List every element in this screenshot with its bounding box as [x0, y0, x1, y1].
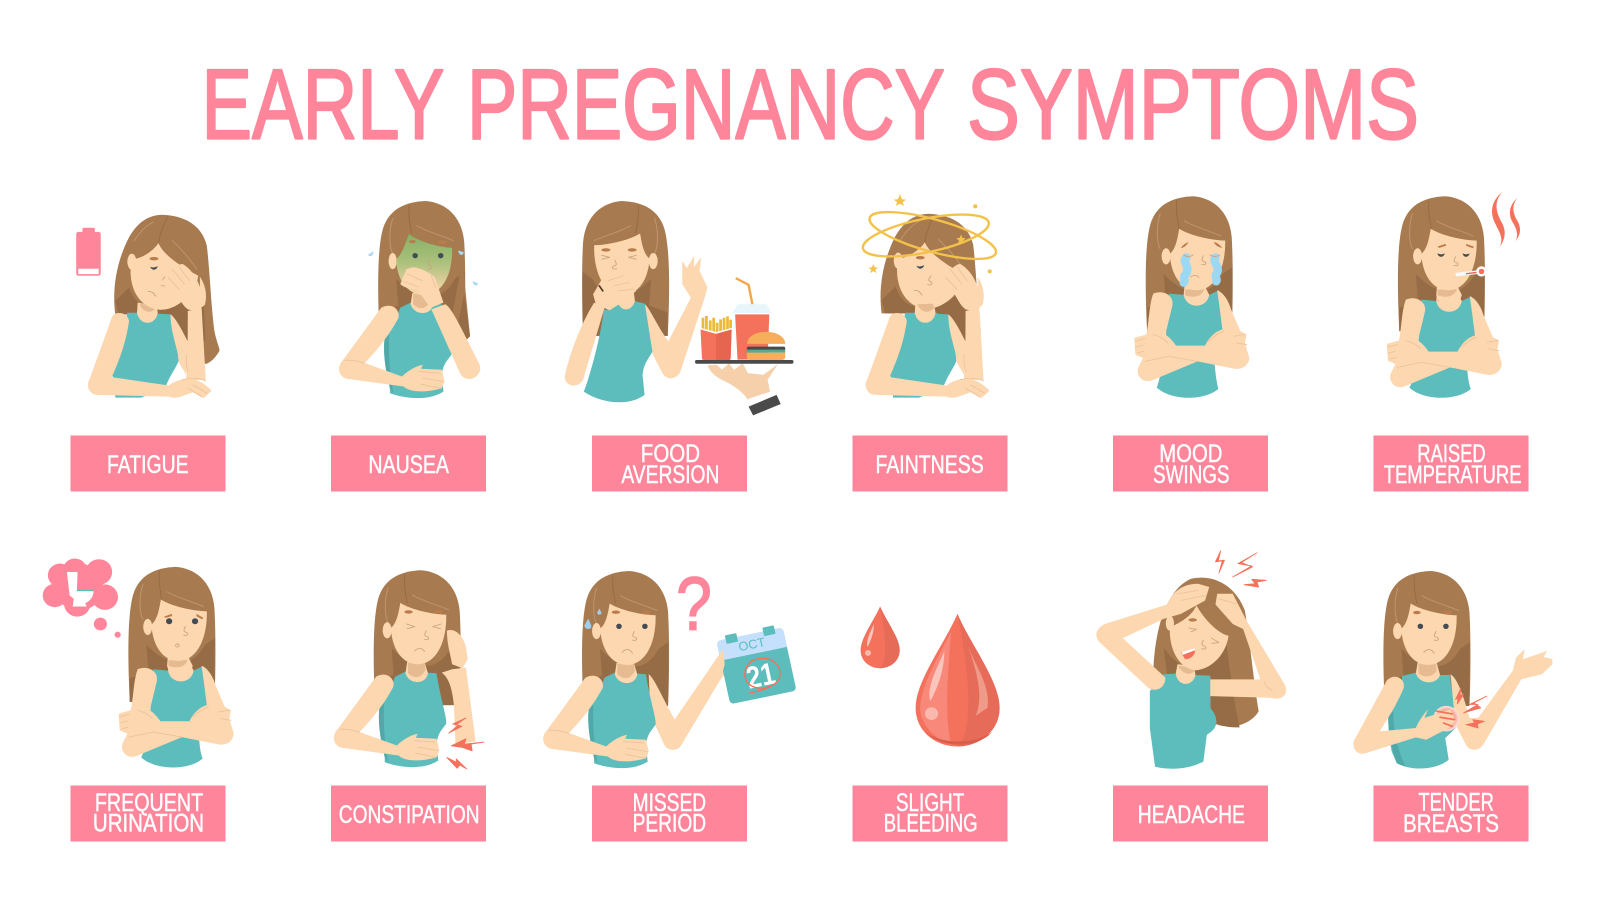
- label: raised temperature: RAISED: [1417, 440, 1486, 468]
- label: headache: HEADACHE: [1138, 801, 1245, 829]
- illustration: woman holding chest: [1353, 571, 1552, 769]
- icon: calendar: 21: [743, 656, 778, 695]
- label: mood swings: SWINGS: [1153, 461, 1230, 489]
- illustration: woman in abdominal pain: [334, 570, 484, 769]
- label: food aversion: AVERSION: [621, 461, 719, 489]
- label: mood swings: MOOD: [1159, 440, 1222, 468]
- label: fatigue: FATIGUE: [107, 451, 189, 479]
- icon: low battery: [76, 228, 101, 276]
- title: EARLY: [202, 48, 444, 160]
- icon: calendar: OCT: [737, 635, 767, 654]
- label: food aversion: FOOD: [641, 440, 700, 468]
- panel: frequent urination: [43, 559, 234, 842]
- icon: pain bolts: [1456, 688, 1487, 728]
- label: frequent urination: URINATION: [93, 810, 204, 838]
- label: tender breasts: BREASTS: [1403, 810, 1499, 838]
- label: missed period: PERIOD: [633, 810, 706, 838]
- panel: missed period: [543, 562, 797, 842]
- illustration: dizzy woman: [859, 194, 1000, 398]
- question mark: ?: [676, 562, 712, 646]
- label: constipation: [331, 786, 486, 842]
- icon: fries, drink and burger on tray: [695, 278, 793, 415]
- panel: raised temperature: [1374, 192, 1528, 491]
- panel: tender breasts: [1353, 571, 1552, 842]
- illustration: woman refusing fast food: [565, 201, 793, 415]
- label: tender breasts: [1374, 786, 1528, 842]
- illustration: woman with calendar: [543, 562, 797, 768]
- panel: nausea: [331, 201, 486, 492]
- label: slight bleeding: SLIGHT: [896, 789, 964, 817]
- label: missed period: MISSED: [633, 789, 706, 817]
- illustration: crying woman: [1134, 196, 1249, 398]
- label: frequent urination: [70, 786, 226, 842]
- panel: faintness: [852, 194, 1008, 492]
- label: tender breasts: TENDER: [1418, 788, 1494, 816]
- illustration: worried woman thinking of toilet: [43, 559, 234, 767]
- label: headache: [1113, 786, 1268, 842]
- tears: [1184, 257, 1218, 283]
- label: slight bleeding: [852, 786, 1008, 842]
- open mouth: [1181, 648, 1195, 659]
- label: fatigue: [70, 436, 226, 492]
- label: slight bleeding: BLEEDING: [884, 810, 978, 838]
- icon: thought bubble with toilet: [43, 559, 121, 638]
- label: faintness: [852, 436, 1008, 492]
- label: food aversion: [592, 436, 747, 492]
- label: raised temperature: TEMPERATURE: [1384, 461, 1522, 489]
- sweat drops: [368, 251, 478, 285]
- label: mood swings: [1113, 436, 1268, 492]
- sore spot: [1433, 706, 1459, 731]
- panel: constipation: [331, 570, 486, 842]
- illustration: woman with thermometer: [1387, 192, 1520, 398]
- icon: small blood drop: [861, 607, 900, 668]
- icon: heat waves: [1492, 192, 1520, 247]
- sweat drops: [584, 609, 601, 629]
- icon: calendar: [716, 624, 797, 704]
- label: constipation: CONSTIPATION: [339, 801, 480, 829]
- thermometer: [1457, 266, 1487, 276]
- icon: large blood drop: [916, 614, 1000, 746]
- label: missed period: [592, 786, 747, 842]
- icon: pain bolts: [1215, 551, 1266, 587]
- illustration: woman holding head: [1096, 551, 1286, 769]
- label: raised temperature: [1374, 436, 1528, 492]
- illustration: nauseous woman: [339, 201, 480, 398]
- label: nausea: NAUSEA: [368, 451, 449, 479]
- panel: fatigue: [70, 215, 226, 491]
- icon: pain bolts: [447, 718, 484, 769]
- nauseous green face: [396, 234, 452, 295]
- illustration: tired woman with low battery: [76, 215, 220, 398]
- panel: slight bleeding: [852, 607, 1008, 842]
- panel: headache: [1096, 551, 1286, 842]
- label: faintness: FAINTNESS: [876, 451, 984, 479]
- panel: food aversion: [565, 201, 793, 492]
- title: [202, 48, 1419, 160]
- icon: dizzy rings and stars: [859, 194, 1000, 273]
- title: SYMPTOMS: [967, 48, 1419, 160]
- panel: mood swings: [1113, 196, 1268, 491]
- label: frequent urination: FREQUENT: [95, 789, 203, 817]
- label: nausea: [331, 436, 486, 492]
- title: PREGNANCY: [467, 48, 945, 160]
- illustration: two blood drops: [861, 607, 1000, 746]
